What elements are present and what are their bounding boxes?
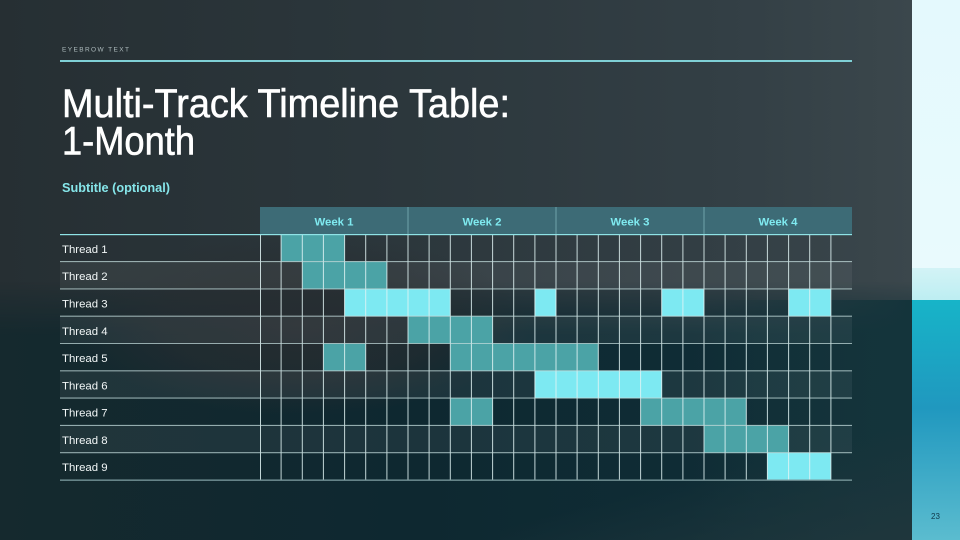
thread labels: Thread 8 [62, 435, 108, 447]
thread labels: Thread 3 [62, 298, 108, 310]
bar: thread 1 [281, 234, 344, 262]
bars: thread 3 [345, 289, 831, 316]
bar: thread 6 [535, 371, 662, 398]
thread labels [62, 244, 108, 474]
week header band: Week 3 [610, 216, 650, 228]
title [62, 82, 510, 164]
week header band: Week 1 [314, 216, 354, 228]
header rule [60, 234, 852, 235]
week header band: Week 4 [758, 216, 798, 228]
title: Multi-Track Timeline Table: [62, 82, 510, 126]
bars: thread 7 [450, 398, 746, 425]
thread labels: Thread 9 [62, 462, 108, 474]
thread labels: Thread 5 [62, 353, 108, 365]
page number: 23 [931, 512, 940, 521]
thread labels: Thread 7 [62, 408, 108, 420]
thread labels: Thread 4 [62, 326, 108, 338]
right decorative sidebar [912, 0, 960, 540]
alternating row bands [60, 262, 852, 453]
bottom rule [60, 480, 852, 481]
timeline bars [281, 234, 831, 480]
week header band [260, 207, 852, 234]
bars: thread 5 [323, 344, 598, 371]
timeline table [60, 207, 852, 481]
subtitle: Subtitle (optional) [62, 180, 170, 195]
title: 1-Month [62, 120, 195, 164]
eyebrow: EYEBROW TEXT [62, 46, 129, 54]
grid vertical lines [260, 234, 831, 480]
bar: thread 4 [408, 316, 493, 344]
thread labels: Thread 2 [62, 271, 108, 283]
thread labels: Thread 1 [62, 244, 108, 256]
bar: thread 9 [767, 453, 831, 480]
grid horizontal lines [60, 262, 852, 453]
week header band: Week 2 [462, 216, 502, 228]
bar: thread 2 [302, 262, 387, 289]
thread labels: Thread 6 [62, 380, 108, 392]
eyebrow rule [60, 60, 852, 62]
bar: thread 8 [704, 425, 789, 453]
